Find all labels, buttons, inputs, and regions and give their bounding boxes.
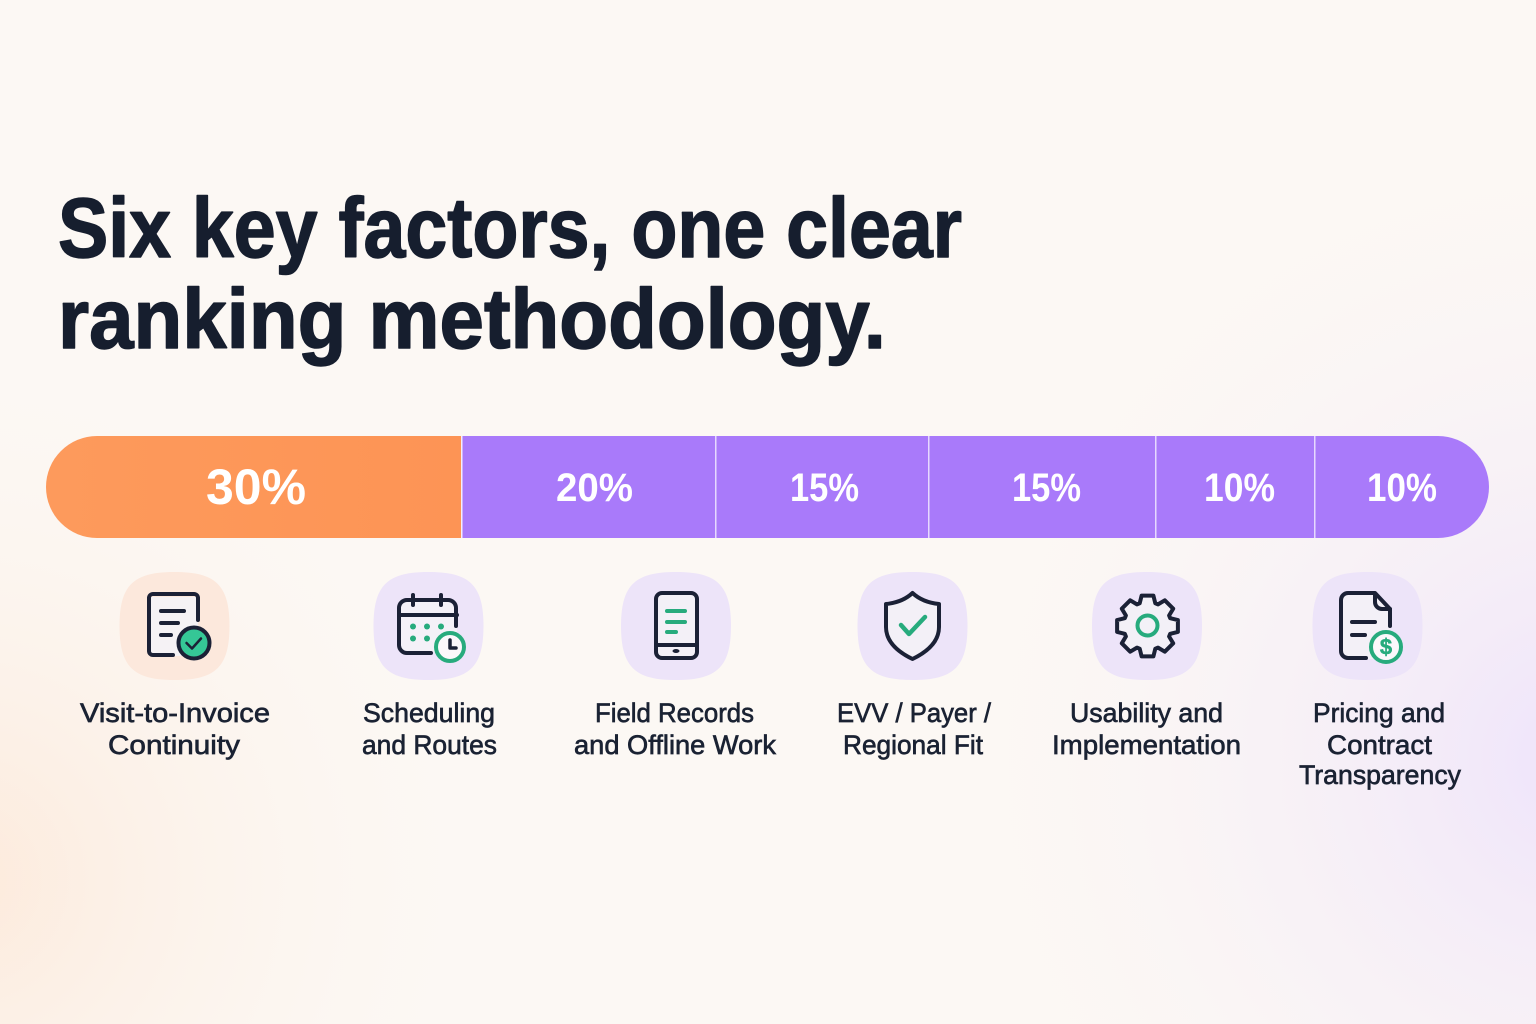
- label: visit-to-invoice continuity: Continuity: [108, 730, 241, 760]
- label: usability and implementation: Usability and: [1070, 698, 1223, 728]
- weighting bar: 15%: [1012, 466, 1081, 510]
- label: scheduling and routes: Scheduling: [363, 698, 495, 728]
- label: usability and implementation: Implementation: [1052, 730, 1241, 760]
- label: evv / payer / regional fit: EVV / Payer /: [837, 698, 991, 728]
- label: visit-to-invoice continuity: Visit-to-Invoice: [80, 698, 270, 728]
- weighting bar: 10%: [1204, 466, 1275, 510]
- title: Six key factors, one clear: [58, 181, 962, 275]
- weighting bar: [46, 436, 1489, 538]
- icon: document with dollar: [1312, 572, 1422, 680]
- icon: shield with check: [858, 572, 968, 680]
- weighting bar: 20%: [556, 466, 633, 510]
- label: evv / payer / regional fit: [837, 698, 991, 760]
- title: [58, 181, 962, 366]
- label: pricing and contract transparency: [1299, 698, 1461, 790]
- label: scheduling and routes: [362, 698, 497, 760]
- label: visit-to-invoice continuity: [80, 698, 270, 760]
- label: field records and offline work: Field Records: [595, 698, 754, 728]
- label: pricing and contract transparency: Contract: [1327, 730, 1433, 760]
- label: scheduling and routes: and Routes: [362, 730, 497, 760]
- icon: gear: [1092, 572, 1202, 680]
- label: field records and offline work: [574, 698, 776, 760]
- weighting bar: 30%: [206, 459, 306, 515]
- weighting bar: 10%: [1367, 466, 1437, 510]
- weighting bar: 15%: [790, 466, 859, 510]
- title: ranking methodology.: [58, 272, 886, 366]
- icon: document with check: [120, 572, 230, 680]
- icon: calendar with clock: [374, 572, 484, 680]
- label: usability and implementation: [1052, 698, 1241, 760]
- icon: mobile phone: [621, 572, 731, 680]
- label: pricing and contract transparency: Transparency: [1299, 760, 1461, 790]
- icon: document with dollar: $: [1380, 634, 1392, 660]
- label: field records and offline work: and Offline Work: [574, 730, 776, 760]
- label: evv / payer / regional fit: Regional Fit: [843, 730, 983, 760]
- label: pricing and contract transparency: Pricing and: [1313, 698, 1445, 728]
